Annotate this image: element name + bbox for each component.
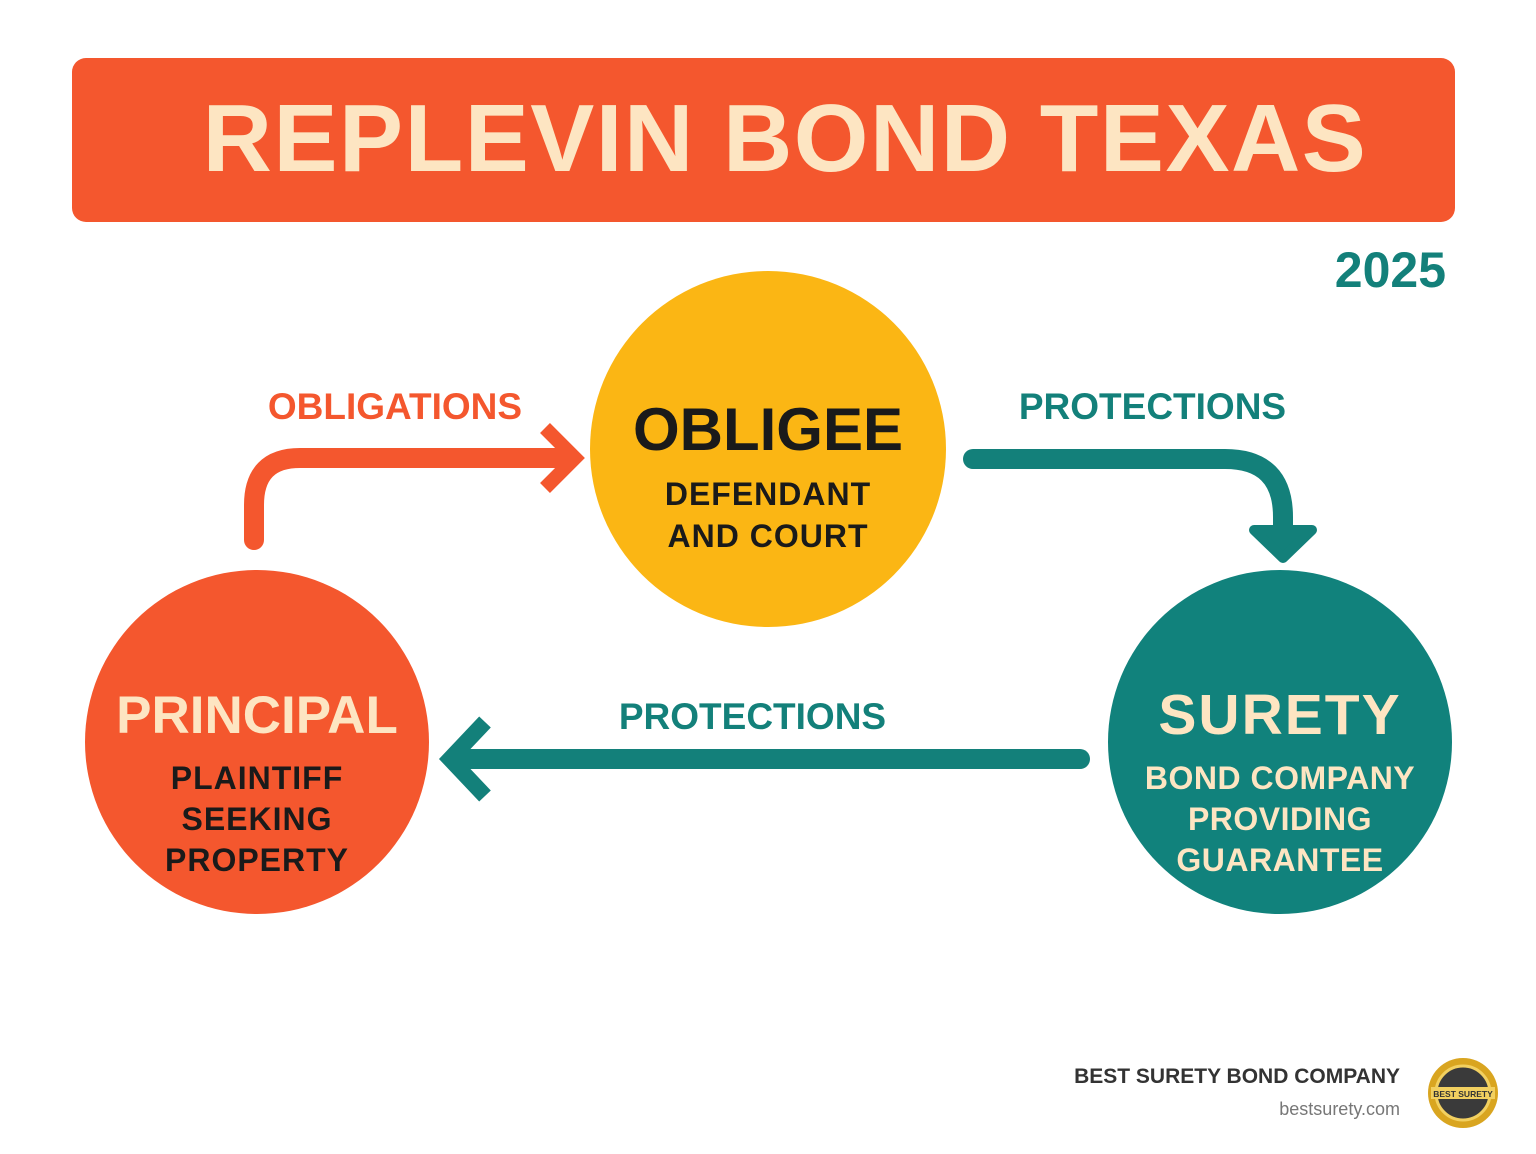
title: REPLEVIN BOND TEXAS	[203, 85, 1367, 192]
obligee text: DEFENDANT	[665, 476, 871, 512]
label: protections bottom: PROTECTIONS	[619, 696, 886, 737]
surety text	[1145, 760, 1415, 878]
obligee heading: OBLIGEE	[633, 396, 903, 463]
principal text: SEEKING	[181, 801, 333, 837]
principal heading: PRINCIPAL	[116, 686, 398, 745]
circle: obligee	[590, 271, 946, 627]
arrow: obligations	[254, 428, 575, 540]
principal text: PROPERTY	[165, 842, 349, 878]
principal text: PLAINTIFF	[171, 760, 343, 796]
footer url: bestsurety.com	[1279, 1099, 1400, 1119]
obligee text	[665, 476, 871, 554]
label: protections top: PROTECTIONS	[1019, 386, 1286, 427]
footer company name: BEST SURETY BOND COMPANY	[1074, 1065, 1400, 1088]
arrow: protections to principal	[450, 722, 1080, 796]
arrow: protections to surety	[973, 459, 1312, 558]
obligee text: AND COURT	[668, 518, 868, 554]
surety text: BOND COMPANY	[1145, 760, 1415, 796]
circle: principal	[85, 570, 429, 914]
circle: surety	[1108, 570, 1452, 914]
surety text: PROVIDING	[1188, 801, 1372, 837]
icon: badge: BEST SURETY	[1433, 1089, 1493, 1099]
year: 2025	[1335, 242, 1446, 298]
label: obligations: OBLIGATIONS	[268, 386, 522, 427]
surety text: GUARANTEE	[1176, 842, 1384, 878]
principal text	[165, 760, 349, 878]
title bar	[72, 58, 1455, 222]
surety heading: SURETY	[1158, 683, 1402, 747]
icon: badge	[1428, 1058, 1498, 1128]
